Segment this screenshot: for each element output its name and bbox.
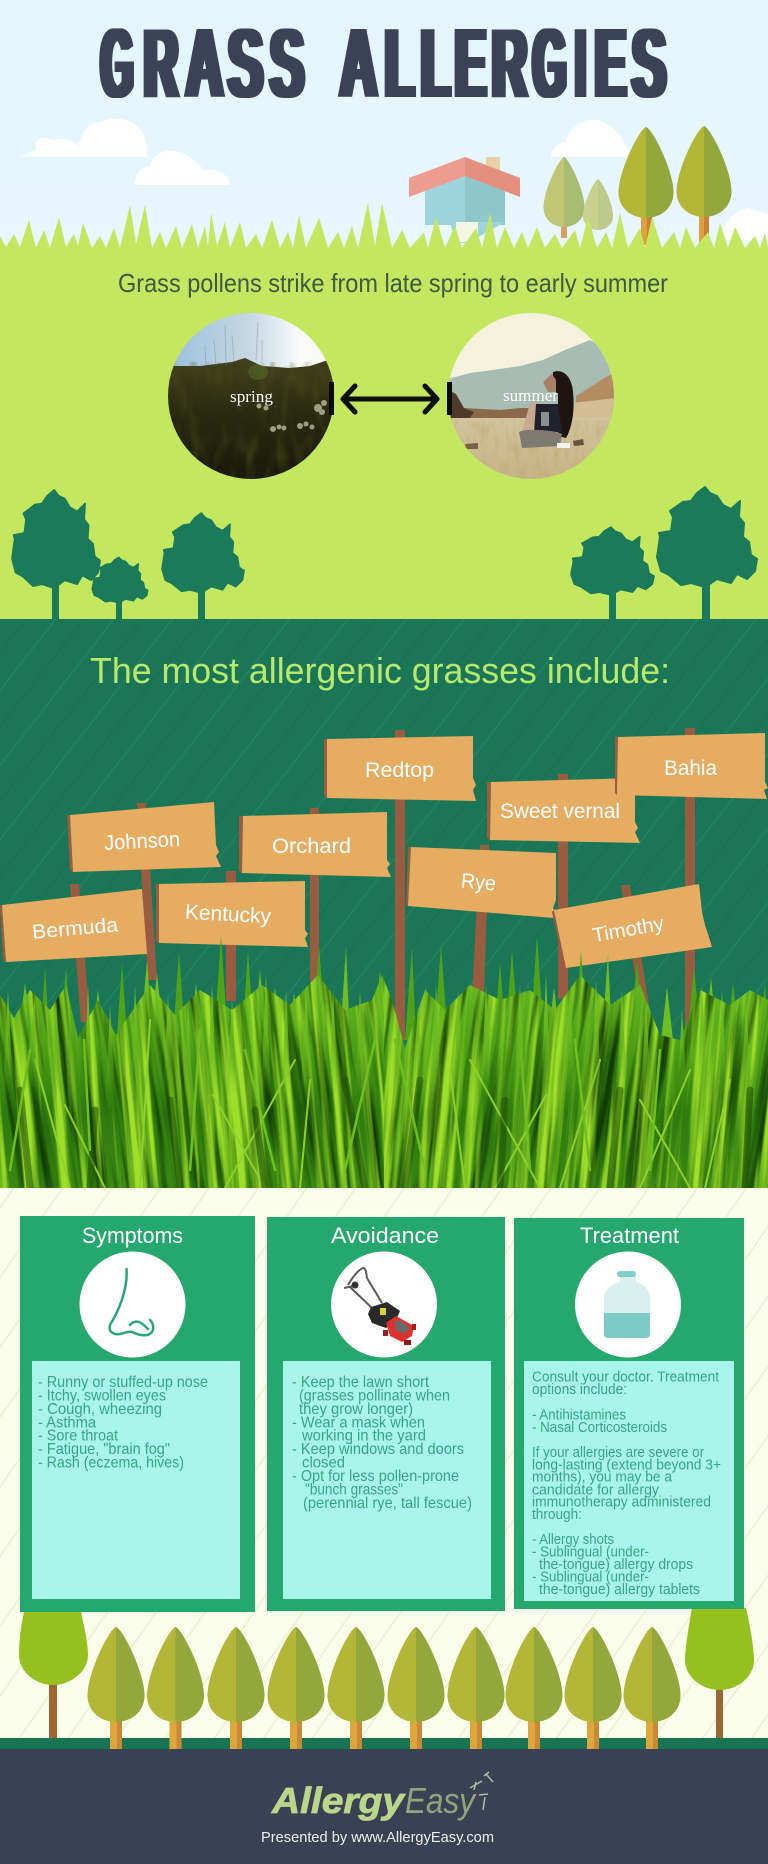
footer credit: Presented by www.AllergyEasy.com — [261, 1829, 494, 1846]
title: L — [421, 8, 450, 118]
title: S — [632, 8, 666, 118]
text box: treatment details: - Sublingual (under- — [532, 1544, 649, 1561]
heading: treatment: Treatment — [580, 1223, 679, 1248]
sign: Redtop — [324, 736, 476, 801]
heading: symptoms: Symptoms — [82, 1223, 183, 1248]
panel: symptoms — [20, 1216, 255, 1612]
title: S — [228, 8, 263, 118]
label: spring: spring — [230, 387, 274, 406]
sign posts — [70, 728, 695, 1040]
text box: avoidance list: (perennial rye, tall fescue) — [303, 1495, 472, 1512]
sign: Bahia: Bahia — [664, 757, 717, 780]
icon: nose — [80, 1252, 186, 1358]
summer photo edge bar — [447, 382, 452, 415]
text box: treatment details: immunotherapy administered — [532, 1494, 711, 1511]
title: A — [340, 8, 377, 118]
text box: treatment details: - Sublingual (under- — [532, 1568, 649, 1585]
text box: treatment details: the-tongue) allergy tablets — [539, 1581, 700, 1598]
text box: treatment details: - Allergy shots — [532, 1531, 614, 1548]
title: R — [144, 8, 178, 118]
sign: Bermuda — [0, 889, 147, 962]
panel: lower background — [0, 1188, 768, 1740]
heading: avoidance: Avoidance — [331, 1223, 439, 1248]
title: G — [533, 8, 566, 118]
text box: symptoms list: - Rash (eczema, hives) — [38, 1455, 184, 1472]
photo: summer — [448, 313, 616, 481]
text box: symptoms list: - Sore throat — [38, 1428, 118, 1445]
text box: treatment details: - Antihistamines — [532, 1407, 626, 1424]
title: I — [576, 8, 585, 118]
text box: avoidance list: - Keep the lawn short — [292, 1374, 429, 1391]
text box: symptoms list: - Itchy, swollen eyes — [38, 1387, 166, 1404]
clouds — [20, 119, 768, 240]
title — [101, 8, 666, 118]
sign: Sweet vernal — [487, 778, 640, 843]
text box: treatment details — [524, 1361, 734, 1601]
text box: treatment details: long-lasting (extend beyond 3+ — [532, 1456, 721, 1473]
text box: symptoms list: - Asthma — [38, 1414, 96, 1431]
sign: Johnson: Johnson — [104, 828, 181, 855]
grass photo area — [0, 936, 768, 1188]
sign: Redtop: Redtop — [365, 759, 434, 782]
title: S — [270, 8, 304, 118]
sign: Bermuda: Bermuda — [31, 914, 120, 944]
sign: Timothy — [552, 884, 712, 968]
text box: treatment details: - Nasal Corticosteroids — [532, 1419, 667, 1436]
sign: Rye — [406, 847, 556, 918]
logo: AllergyEasy: Allergy — [271, 1780, 406, 1821]
big tree right — [685, 1608, 754, 1738]
icon: bottle — [575, 1252, 681, 1358]
icon: house — [409, 157, 520, 243]
double arrow — [343, 386, 437, 412]
sign: Bahia — [615, 733, 768, 799]
text box: symptoms list — [32, 1361, 240, 1599]
text box: treatment details: the-tongue) allergy drops — [539, 1556, 693, 1573]
silhouette trees left — [12, 490, 244, 620]
text box: treatment details: through: — [532, 1506, 582, 1523]
icon: lawn mower — [331, 1252, 437, 1358]
text box: avoidance list: closed — [302, 1455, 345, 1472]
subtitle: Grass pollens strike from late spring to early summer — [118, 268, 668, 298]
title: R — [492, 8, 527, 118]
sign: Kentucky — [156, 881, 308, 947]
panel: treatment — [514, 1218, 744, 1609]
panel: allergenic grasses background — [0, 619, 768, 1189]
big tree left — [19, 1612, 88, 1738]
footer panel — [0, 1738, 768, 1864]
text box: avoidance list: - Opt for less pollen-prone — [292, 1468, 459, 1485]
icon: dandelion seeds — [470, 1772, 493, 1810]
title: L — [385, 8, 414, 118]
photo: spring — [168, 313, 334, 480]
text box: avoidance list — [283, 1361, 491, 1599]
spring photo edge bar — [329, 382, 334, 415]
label: summer: summer — [503, 386, 558, 405]
text box: avoidance list: "bunch grasses" — [305, 1482, 403, 1498]
lime meadow panel — [0, 203, 768, 622]
text box: symptoms list: - Runny or stuffed-up nose — [38, 1374, 208, 1391]
text box: avoidance list: - Keep windows and doors — [292, 1441, 464, 1458]
sign: Timothy: Timothy — [591, 913, 666, 947]
trees near house — [544, 126, 732, 245]
text box: treatment details: Consult your doctor. Treatment — [532, 1369, 720, 1386]
sign: Orchard — [239, 812, 391, 877]
title: G — [101, 8, 133, 118]
text box: treatment details: options include: — [532, 1381, 627, 1398]
text box: treatment details: candidate for allergy — [532, 1481, 659, 1498]
text box: symptoms list: - Cough, wheezing — [38, 1401, 162, 1418]
text box: avoidance list: they grow longer) — [299, 1401, 413, 1418]
text box: treatment details: If your allergies are severe or — [532, 1444, 704, 1461]
sign: Orchard: Orchard — [272, 835, 351, 858]
title: A — [186, 8, 223, 118]
row of trees — [88, 1627, 680, 1749]
sign: Sweet vernal: Sweet vernal — [500, 800, 620, 823]
silhouette trees right — [571, 487, 757, 620]
panel: avoidance — [267, 1217, 505, 1611]
heading: most allergenic grasses: The most allergenic grasses include: — [90, 650, 670, 691]
text box: avoidance list: - Wear a mask when — [292, 1414, 425, 1431]
text box: treatment details: months), you may be a — [532, 1469, 673, 1486]
title: E — [595, 8, 626, 118]
sign: Kentucky: Kentucky — [184, 901, 272, 928]
logo: AllergyEasy: Easy — [405, 1780, 477, 1821]
sky background — [0, 0, 768, 260]
text box: avoidance list: (grasses pollinate when — [299, 1387, 450, 1404]
text box: avoidance list: working in the yard — [301, 1428, 426, 1445]
sign: Rye: Rye — [460, 870, 497, 896]
title: E — [455, 8, 486, 118]
sign: Johnson — [67, 802, 221, 872]
text box: symptoms list: - Fatigue, "brain fog" — [38, 1441, 170, 1458]
logo: AllergyEasy — [271, 1772, 493, 1821]
